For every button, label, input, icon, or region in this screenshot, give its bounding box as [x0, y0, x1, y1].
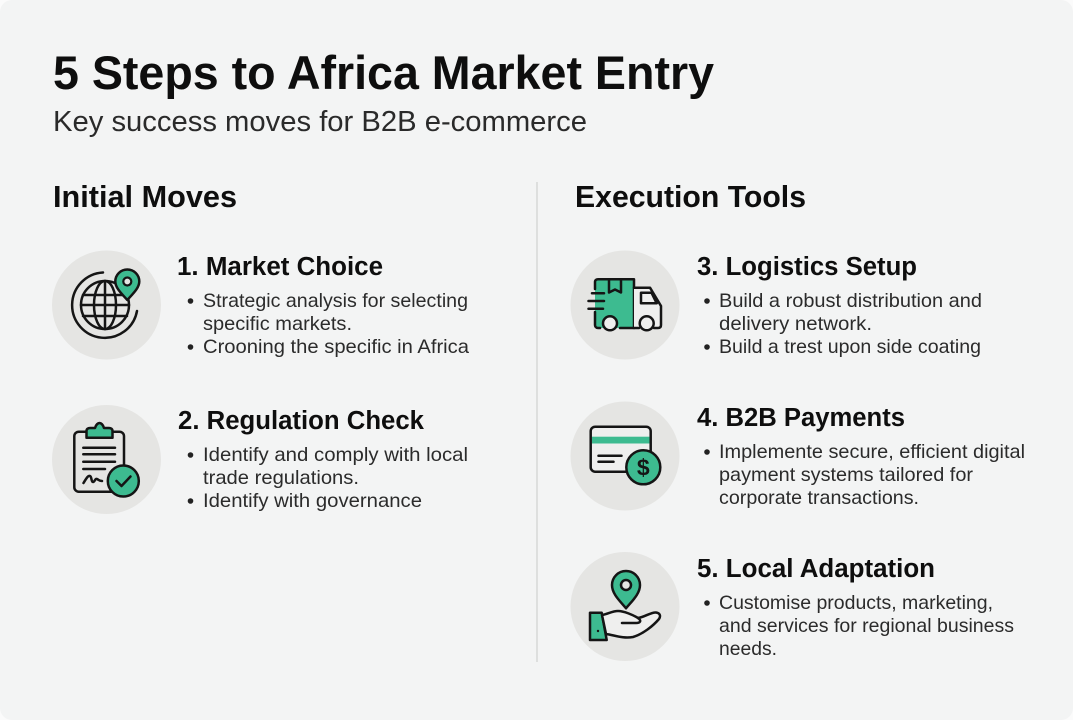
icon: globe with pin [52, 250, 161, 360]
heading: local adaptation: 5. Local Adaptation [697, 555, 935, 583]
icon: card with dollar coin: $ [637, 454, 650, 480]
bullet list: trade regulations. [203, 467, 359, 489]
bullet list [704, 290, 982, 358]
bullet list: Build a robust distribution and [719, 290, 982, 312]
icon: hand holding pin [570, 552, 680, 661]
step 5: local adaptation [570, 552, 1014, 661]
bullet list: Build a trest upon side coating [719, 336, 981, 358]
bullet list [188, 444, 468, 512]
column heading: execution tools: Execution Tools [575, 179, 806, 214]
heading: logistics setup: 3. Logistics Setup [697, 253, 917, 281]
step 3: logistics setup [570, 250, 982, 360]
bullet list: Strategic analysis for selecting [203, 290, 468, 312]
icon: delivery truck [570, 250, 680, 360]
subtitle: Key success moves for B2B e-commerce [53, 106, 587, 138]
bullet list: Customise products, marketing, [719, 592, 993, 614]
bullet list: specific markets. [203, 313, 352, 335]
bullet list: payment systems tailored for [719, 464, 974, 486]
bullet list: needs. [719, 638, 777, 660]
column heading: initial moves: Initial Moves [53, 179, 237, 214]
bullet list: Identify and comply with local [203, 444, 468, 466]
bullet list: Crooning the specific in Africa [203, 336, 469, 358]
title: 5 Steps to Africa Market Entry [53, 46, 714, 99]
bullet list: delivery network. [719, 313, 872, 335]
heading: b2b payments: 4. B2B Payments [697, 404, 905, 432]
step 2: regulation check [52, 405, 468, 514]
bullet list [188, 290, 469, 358]
bullet list: corporate transactions. [719, 487, 919, 509]
heading: regulation check: 2. Regulation Check [178, 407, 425, 435]
heading: market choice: 1. Market Choice [177, 253, 383, 281]
bullet list [704, 441, 1025, 509]
bullet list: Identify with governance [203, 490, 422, 512]
icon: clipboard with check [52, 405, 161, 514]
step 1: market choice [52, 250, 469, 360]
icon: card with dollar coin [570, 402, 680, 510]
bullet list: Implemente secure, efficient digital [719, 441, 1025, 463]
step 4: b2b payments [570, 402, 1025, 510]
bullet list [704, 592, 1014, 660]
bullet list: and services for regional business [719, 615, 1014, 637]
